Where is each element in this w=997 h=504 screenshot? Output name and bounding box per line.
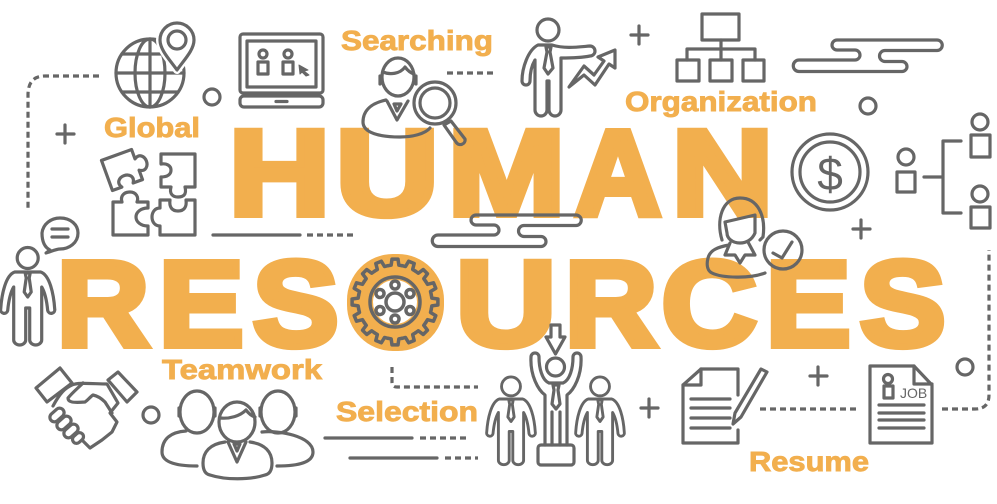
label: Selection: Selection	[336, 396, 478, 427]
icon: searching man with magnifier	[363, 58, 465, 145]
label: Global: Global	[104, 112, 200, 143]
title: RESOURCES: S	[860, 236, 946, 372]
icon: standing man with speech bubble	[1, 218, 78, 345]
title: RESOURCES: C	[662, 236, 757, 372]
title: HUMAN: M	[448, 104, 565, 240]
icon: laptop with people and cursor	[240, 34, 323, 107]
title: RESOURCES: U	[456, 236, 556, 372]
label: Teamwork: Teamwork	[162, 354, 322, 385]
title: RESOURCES: S	[253, 236, 338, 372]
title: RESOURCES: E	[766, 236, 850, 372]
title: HUMAN: N	[672, 104, 773, 240]
title: HUMAN: A	[575, 104, 661, 240]
decoration: cloud line middle	[432, 215, 581, 246]
icon: job document	[870, 366, 932, 443]
icon: puzzle pieces	[101, 146, 195, 235]
icon: handshake	[36, 368, 137, 448]
title: RESOURCES: R	[565, 236, 657, 372]
icon: organization chart	[677, 14, 764, 81]
title: RESOURCES: R	[57, 236, 149, 372]
icon: gear wheel in letter O	[347, 254, 444, 351]
icon: job document: JOB	[900, 385, 927, 401]
icon: team of three people	[162, 391, 313, 479]
icon: globe with map pin	[116, 23, 194, 107]
icon: hierarchy of people	[897, 114, 990, 228]
icon: resume document and pen	[683, 369, 767, 443]
label: Organization: Organization	[625, 86, 817, 117]
decoration: cloud line top right	[793, 40, 942, 72]
title: HUMAN: H	[229, 104, 330, 240]
icon: woman with approval check	[707, 198, 802, 277]
icon: presenter with rising arrow	[522, 19, 615, 116]
icon: dollar coin	[792, 134, 868, 210]
label: Resume: Resume	[749, 446, 869, 477]
icon: dollar coin: $	[817, 148, 843, 200]
label: Searching: Searching	[341, 25, 493, 56]
title: RESOURCES: O	[347, 236, 446, 372]
title: HUMAN: U	[336, 104, 438, 240]
title: RESOURCES: E	[159, 236, 244, 372]
icon: selected person on podium with two candidates	[487, 325, 624, 465]
